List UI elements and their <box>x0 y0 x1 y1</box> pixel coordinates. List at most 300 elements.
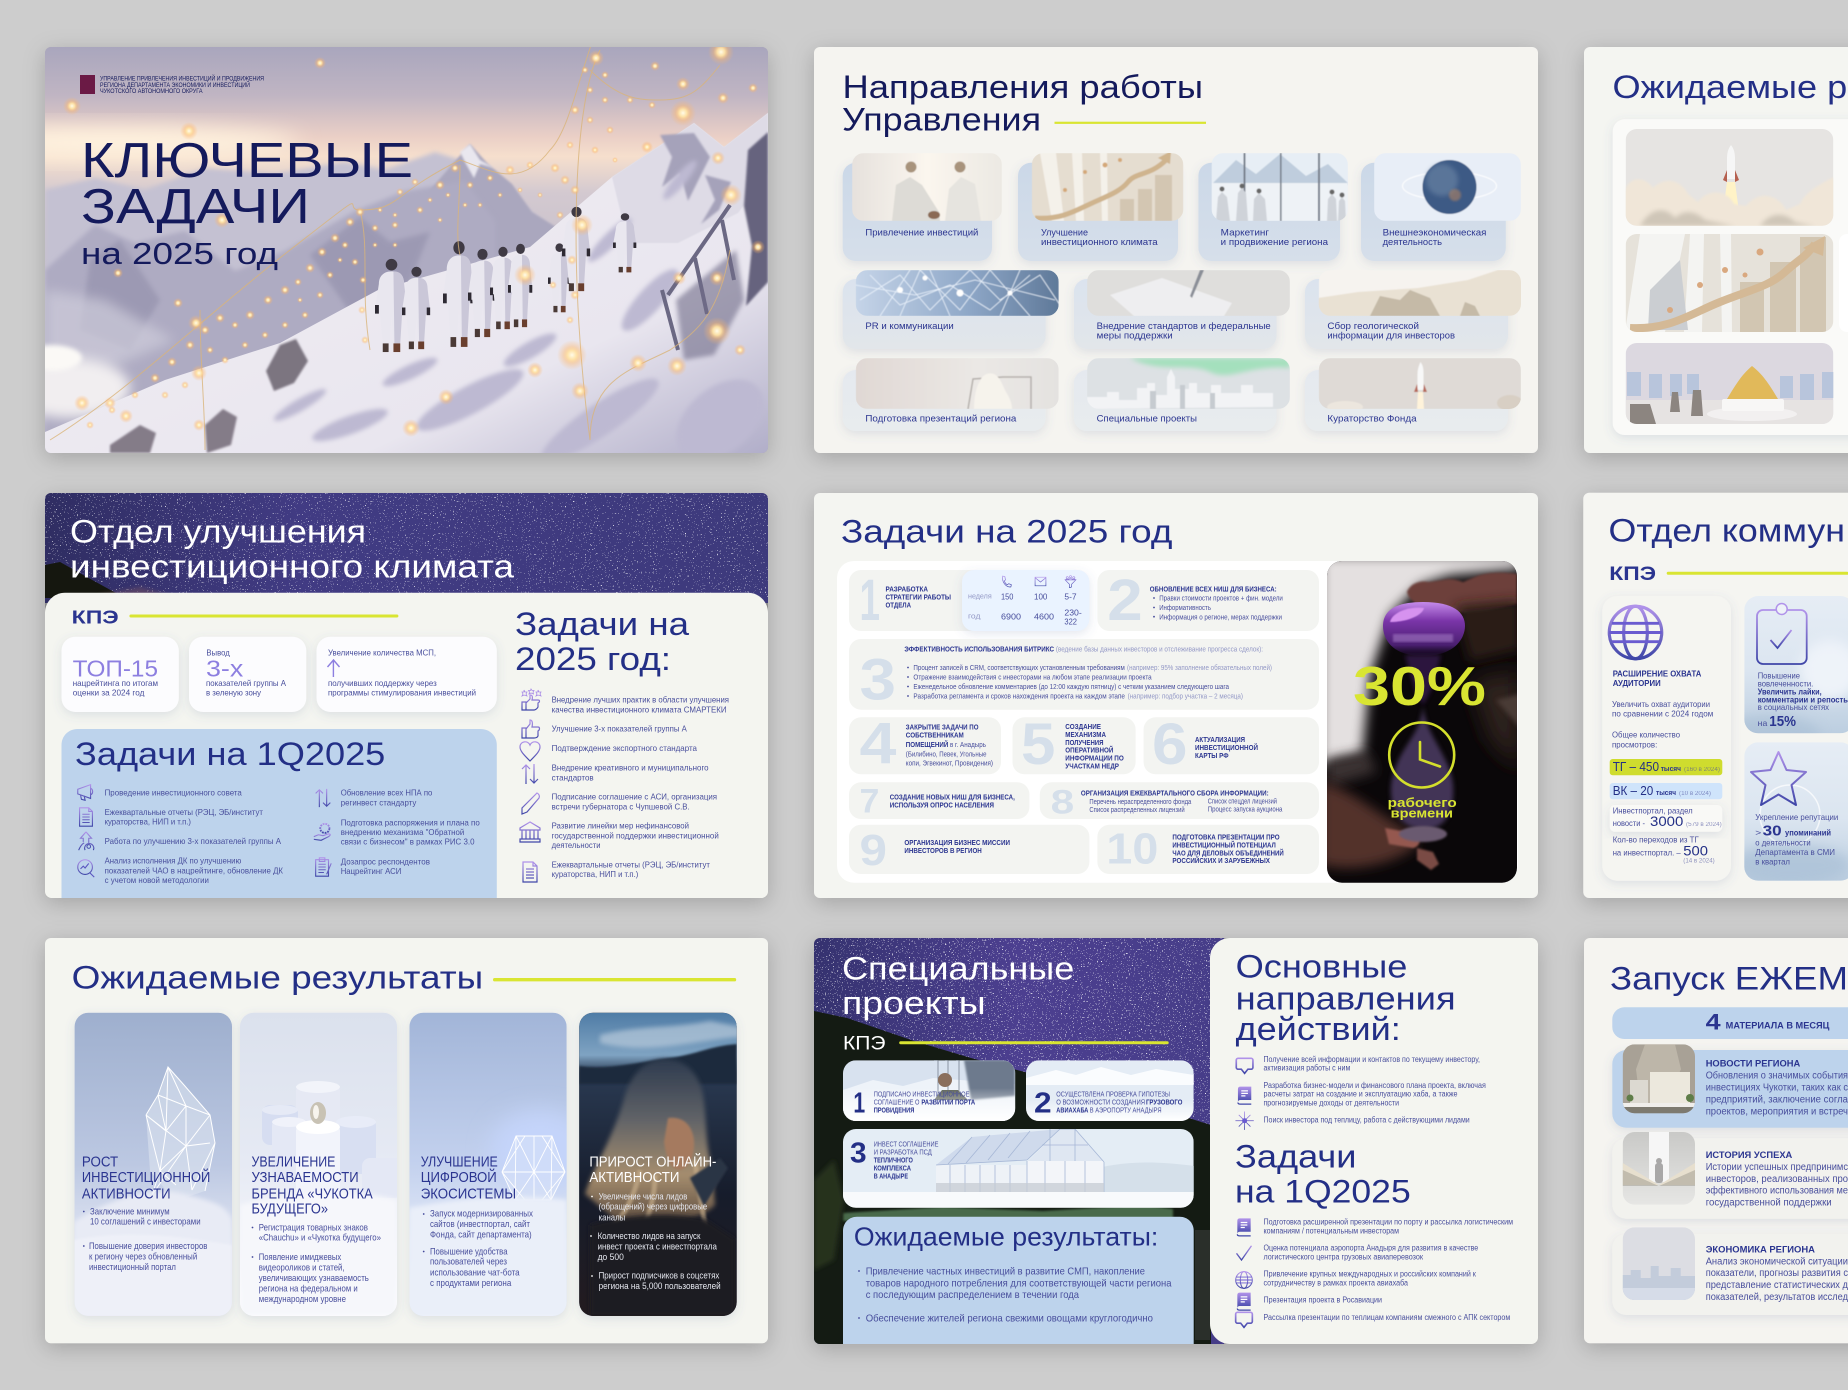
result card: brand awareness: УЗНАВАЕМОСТИ <box>252 1169 359 1186</box>
action list: Получение всей информации и контактов по текущему инвестору, <box>1264 1055 1480 1064</box>
result card: digital ecosystem: Фонда, сайт департамента) <box>430 1230 532 1241</box>
direction card: geology: Сбор геологической <box>1327 321 1419 331</box>
task 2: Информация о регионе, мерах поддержки <box>1159 614 1282 621</box>
heading: Задачи на 2025 год <box>841 514 1173 550</box>
task 2 <box>1097 568 1319 633</box>
lower hand <box>1320 782 1418 868</box>
department caption: РЕГИОНА ДЕПАРТАМЕНТА ЭКОНОМИКИ И ИНВЕСТИЦИЙ <box>100 81 250 89</box>
panel: cover slide <box>36 44 776 466</box>
result card: brand awareness: международном уровне <box>259 1294 346 1305</box>
material card: regional news: НОВОСТИ РЕГИОНА <box>1706 1059 1800 1070</box>
task 1 <box>849 568 1089 633</box>
task 3: (ведение базы данных инвесторов и отслеживание прогресса сделок): <box>1056 645 1263 653</box>
contact targets table: 230- <box>1064 607 1082 617</box>
result card: digital ecosystem: пользователей через <box>430 1257 507 1268</box>
KPI card: three indicators <box>189 637 306 712</box>
direction card: special projects <box>1074 358 1290 431</box>
task list: с учетом новой методологии <box>105 875 209 885</box>
direction card: marketing: и продвижение региона <box>1221 237 1328 247</box>
task 5: ОПЕРАТИВНОЙ <box>1065 746 1113 755</box>
project card 2: 2 <box>1034 1088 1052 1120</box>
task list: Подготовка распоряжения и плана по <box>341 817 480 827</box>
project card 2 <box>1026 1060 1194 1121</box>
metric: investment portal: 3000 <box>1650 813 1684 829</box>
upper bulb <box>1383 602 1465 656</box>
task 3: (например: подбор участка – 2 месяца) <box>1128 692 1243 700</box>
task 3: (например: 95% заполнение обязательных полей) <box>1127 664 1272 672</box>
task 6: 6 <box>1152 712 1188 777</box>
action list: Разработка бизнес-модели и финансового плана проекта, включая <box>1264 1081 1486 1090</box>
icon: star <box>1751 752 1806 805</box>
panel: main directions of action <box>1210 938 1538 1344</box>
task 3: Разработка регламента и сроков нахождения проекта на каждом этапе <box>913 692 1125 700</box>
metric: Telegram: тысяч <box>1661 766 1681 773</box>
caption: рабочего <box>1388 795 1457 810</box>
result card: digital ecosystem: ЭКОСИСТЕМЫ <box>421 1185 516 1202</box>
department caption <box>100 74 264 95</box>
result card: online activity: (обращений) через цифровые <box>599 1202 707 1213</box>
task 10: ПОДГОТОВКА ПРЕЗЕНТАЦИИ ПРО <box>1172 834 1280 841</box>
task 4 <box>849 711 1001 776</box>
task 3: Еженедельное обновление комментариев (до 12:00 каждую пятницу) с четким указанием следующего шага <box>913 683 1229 691</box>
task 7 <box>849 782 1029 821</box>
result card: investment activity: 10 соглашений с инвесторами <box>90 1217 201 1228</box>
panel: tasks for 1Q2025 <box>62 729 497 898</box>
heading: проекты <box>842 985 986 1021</box>
direction card: climate: Улучшение <box>1041 228 1088 238</box>
upper hand <box>1407 573 1517 613</box>
expedition team <box>375 207 636 352</box>
card: audience reach: Общее количество <box>1612 730 1680 740</box>
card: engagement: вовлеченности. <box>1758 678 1813 688</box>
result card: online activity: Количество лидов на запуск <box>598 1231 701 1242</box>
panel: expected results of projects: с последующим распределением в течении года <box>866 1289 1079 1301</box>
icon: arrow up <box>328 660 340 677</box>
result card: digital ecosystem: использование чат-бота <box>430 1267 520 1278</box>
contact targets table <box>962 570 1089 631</box>
logo <box>80 75 95 94</box>
direction card: standards: Внедрение стандартов и федеральные <box>1097 321 1271 331</box>
card: reputation: в квартал <box>1755 856 1790 866</box>
task 3: Процент записей в CRM, соответствующих установленным требованиям <box>913 664 1125 672</box>
task 4: в г. Анадырь <box>950 742 986 749</box>
image: exhibition hall <box>1626 343 1834 424</box>
project card 1: ПОДПИСАНО ИНВЕСТИЦИОННОЕ <box>874 1092 970 1099</box>
result card: online activity: АКТИВНОСТИ <box>589 1169 680 1186</box>
task 7: СОЗДАНИЕ НОВЫХ НИШ ДЛЯ БИЗНЕСА, <box>890 795 1015 802</box>
task 1: СТРАТЕГИИ РАБОТЫ <box>886 594 951 601</box>
yearly task icons <box>520 689 541 882</box>
direction card: investments <box>843 153 1002 261</box>
panel: expected results of projects <box>843 1217 1194 1344</box>
task 4: СОБСТВЕННИКАМ <box>906 733 964 740</box>
heading <box>842 950 1074 1021</box>
project card 1 <box>843 1060 1015 1121</box>
metric: transitions <box>1613 834 1715 864</box>
result card: investment activity: РОСТ <box>82 1154 118 1171</box>
result card: online activity: региона на 5,000 пользователей <box>599 1281 721 1292</box>
KPI label: КПЭ <box>1609 564 1656 585</box>
yearly task list: кураторства, НИП и т.п.) <box>552 869 638 879</box>
task 5: МЕХАНИЗМА <box>1065 732 1106 739</box>
task list: регинвест стандарту <box>341 797 417 807</box>
heading: Специальные <box>842 950 1074 986</box>
direction card: geology: информации для инвесторов <box>1327 331 1455 341</box>
yearly task list: встречи губернатора с Чупшевой С.В. <box>552 801 690 811</box>
project card 3: ИНВЕСТ СОГЛАШЕНИЕ <box>874 1142 939 1149</box>
project card 1: ПРОВИДЕНИЯ <box>874 1108 914 1115</box>
heading: Запуск ЕЖЕМ <box>1610 960 1848 996</box>
card: engagement <box>1744 596 1848 734</box>
panel: expected results of projects: товаров народного потребления для соответствующей части региона <box>866 1277 1172 1289</box>
icon: globe <box>1609 606 1662 659</box>
direction card: climate: инвестиционного климата <box>1041 237 1158 247</box>
contact targets table: 150 <box>1001 591 1014 601</box>
inner panel <box>1613 119 1848 435</box>
project card 3: 3 <box>850 1138 867 1170</box>
task 5: СОЗДАНИЕ <box>1065 724 1101 731</box>
task 3: 3 <box>860 647 896 712</box>
image: rocket launch <box>1625 129 1834 230</box>
result card: digital ecosystem <box>409 1013 590 1316</box>
project card 1: СОГЛАШЕНИЕ О <box>874 1100 920 1107</box>
project card 3: И РАЗРАБОТКА ПСД <box>874 1150 932 1157</box>
task 8: 8 <box>1051 783 1074 821</box>
task 10: ЧАО ДЛЯ ДЕЛОВЫХ ОБЪЕДИНЕНИЙ <box>1172 848 1284 857</box>
direction card: presentations: Подготовка презентаций региона <box>865 414 1016 424</box>
direction card: foreign trade: Внешнеэкономическая <box>1383 228 1487 238</box>
quarter task list: логистического центра грузовых авиаперевозок <box>1264 1253 1423 1262</box>
task 10: 10 <box>1106 824 1158 873</box>
panel: investment climate department <box>45 493 768 898</box>
result card: digital ecosystem: Повышение удобства <box>430 1246 508 1257</box>
string lights <box>50 20 765 450</box>
task 6: КАРТЫ РФ <box>1195 753 1229 760</box>
heading <box>842 69 1203 138</box>
task board <box>837 561 1518 883</box>
quarter task list: Рассылка презентации по теплицам компаниям смежного с АПК сектором <box>1264 1313 1510 1322</box>
panel: monthly launch (cropped) <box>1584 938 1848 1343</box>
contact targets table: 6900 <box>1001 611 1021 621</box>
direction card: foreign trade <box>1361 153 1521 261</box>
task list: Ежеквартальные отчеты (РЭЦ, ЭБ/институт <box>105 807 263 817</box>
project card 1: 1 <box>853 1088 865 1120</box>
result card: digital ecosystem: сайтов (инвестпортал, сайт <box>430 1219 531 1230</box>
card: audience reach: по сравнении с 2024 годом <box>1612 709 1713 719</box>
rock outcrops <box>266 339 308 391</box>
direction card: marketing: Маркетинг <box>1221 228 1270 238</box>
quarter task list: Презентация проекта в Росавиации <box>1264 1296 1382 1305</box>
metric: investment portal: Инвестпортал, раздел <box>1613 805 1693 815</box>
result card: online activity: каналы <box>599 1212 625 1223</box>
task 3: ЭФФЕКТИВНОСТЬ ИСПОЛЬЗОВАНИЯ БИТРИКС <box>904 646 1054 653</box>
heading: Ожидаемые результаты <box>72 959 483 995</box>
task 2: 2 <box>1107 568 1143 633</box>
result card: brand awareness: видеороликов и статей, <box>259 1262 345 1273</box>
heading: tasks for 2025 <box>515 606 689 677</box>
task list: показателей ЧАО в нацрейтинге, обновление ДК <box>105 865 283 875</box>
task 6 <box>1144 712 1319 777</box>
task 9: ОРГАНИЗАЦИЯ БИЗНЕС МИССИИ <box>904 840 1010 847</box>
heading: Управления <box>842 102 1041 138</box>
metric: Telegram <box>1610 759 1722 775</box>
card: engagement: в социальных сетях <box>1758 702 1830 712</box>
yearly task list: Подтверждение экспортного стандарта <box>552 743 697 753</box>
image: hourglass with 30 percent callout <box>1320 555 1520 883</box>
result card: digital ecosystem: с продуктами региона <box>430 1278 512 1289</box>
result card: online activity <box>579 1013 740 1316</box>
metric: Telegram: (160 в 2024) <box>1684 767 1720 773</box>
task 9: ИНВЕСТОРОВ В РЕГИОН <box>904 848 982 855</box>
direction card: foreign trade: деятельность <box>1383 237 1442 247</box>
result card: digital ecosystem: Запуск модернизированных <box>430 1209 533 1220</box>
task 7: 7 <box>860 783 879 821</box>
card: reputation: Укрепление репутации <box>1755 812 1839 822</box>
lower bulb <box>1391 705 1453 829</box>
task 1: 1 <box>860 568 880 633</box>
yearly task list: Внедрение креативного и муниципального <box>552 763 709 773</box>
result card: brand awareness: региона на федеральном и <box>259 1284 358 1295</box>
task 9: 9 <box>860 826 887 875</box>
direction card: presentations <box>843 358 1059 431</box>
result card: brand awareness: «Chauchu» и «Чукотка будущего» <box>259 1233 381 1244</box>
heading: инвестиционного климата <box>70 548 514 584</box>
quarter task list: Подготовка расширенной презентации по порту и рассылка логистическим <box>1264 1218 1513 1227</box>
contact targets table: 5-7 <box>1064 591 1077 601</box>
card: reputation: 30 <box>1763 823 1782 840</box>
KPI card: three indicators: в зеленую зону <box>206 688 262 698</box>
material card: regional news <box>1612 1044 1848 1128</box>
panel: expected results of projects: Ожидаемые результаты: <box>854 1222 1158 1252</box>
task 4: 4 <box>860 711 896 776</box>
panel: main directions of action: Задачи <box>1235 1138 1356 1174</box>
task 2: Правки стоимости проектов + фин. модели <box>1159 596 1283 603</box>
panel: expected results of projects: Привлечение частных инвестиций в развитие СМП, накопление <box>866 1265 1145 1277</box>
KPI card: top 15 <box>62 637 179 712</box>
yearly task list: качества инвестиционного климата СМАРТЕКИ <box>552 704 727 714</box>
result card: brand awareness: БУДУЩЕГО» <box>252 1200 328 1217</box>
contact targets table: неделя <box>968 594 992 601</box>
heading: tasks for 2025: 2025 год: <box>515 641 671 677</box>
project card 3: КОМПЛЕКСА <box>874 1166 911 1173</box>
project card 2: О ВОЗМОЖНОСТИ СОЗДАНИЯ <box>1056 1100 1145 1107</box>
panel: expected results of projects: Обеспечение жителей региона свежими овощами круглогодично <box>866 1312 1153 1324</box>
task list: кураторства, НИП и т.п.) <box>105 817 191 827</box>
cover title: ЗАДАЧИ <box>81 180 310 234</box>
card: engagement: Повышение <box>1758 670 1800 680</box>
task 2: Информативность <box>1159 605 1211 612</box>
task 6: ИНВЕСТИЦИОННОЙ <box>1195 743 1258 752</box>
card: engagement: на <box>1758 718 1768 728</box>
materials per month bar: МАТЕРИАЛА В МЕСЯЦ <box>1726 1021 1830 1031</box>
yearly task list <box>552 695 729 879</box>
card: audience reach: просмотров: <box>1612 739 1657 749</box>
result card: brand awareness: УВЕЛИЧЕНИЕ <box>252 1154 335 1171</box>
task list: Дозапрос респондентов <box>341 856 430 866</box>
panel: special projects <box>814 938 1538 1344</box>
task 10: ИНВЕСТИЦИОННЫЙ ПОТЕНЦИАЛ <box>1172 840 1276 849</box>
project card 2: В АЭРОПОРТУ АНАДЫРЯ <box>1090 1108 1162 1115</box>
contact targets table: год <box>968 614 980 621</box>
yearly task list: деятельности <box>552 840 601 850</box>
card: reputation: Департамента в СМИ <box>1755 847 1835 857</box>
panel: expected results <box>45 938 768 1343</box>
direction card: PR: PR и коммуникации <box>865 321 954 331</box>
KPI card: top 15: оценки за 2024 год <box>73 688 144 698</box>
task 8: Процесс запуска аукциона <box>1208 807 1282 814</box>
task 1: РАЗРАБОТКА <box>886 586 928 593</box>
icon: clipboard check <box>1757 610 1807 664</box>
result card: online activity: до 500 <box>598 1252 624 1263</box>
direction card: investments: Привлечение инвестиций <box>865 228 978 238</box>
material card: regional economy: ЭКОНОМИКА РЕГИОНА <box>1706 1244 1815 1255</box>
quarter task list: Привлечение крупных международных и российских компаний к <box>1264 1270 1476 1279</box>
card: audience reach: РАСШИРЕНИЕ ОХВАТА <box>1613 669 1701 679</box>
result card: investment activity: к региону через обновленный <box>89 1251 197 1262</box>
panel: main directions of action: Основные <box>1236 949 1407 985</box>
action list <box>1264 1055 1486 1125</box>
KPI card: three indicators: 3-х <box>206 656 244 682</box>
result card: digital ecosystem: ЦИФРОВОЙ <box>421 1168 497 1186</box>
card: reputation: > <box>1755 828 1761 838</box>
result card: online activity: ПРИРОСТ ОНЛАЙН- <box>589 1153 716 1171</box>
metric: investment portal <box>1610 805 1722 832</box>
project card 3 <box>843 1129 1194 1208</box>
result card: online activity: инвест проекта с инвестпортала <box>598 1241 717 1252</box>
result card: online activity: Прирост подписчиков в соцсетях <box>599 1271 720 1282</box>
heading: Направления работы <box>842 69 1203 105</box>
direction card: special projects: Специальные проекты <box>1097 414 1197 424</box>
task 4: копи, Эгвекинот, Провидения) <box>906 761 993 768</box>
card: engagement: 15% <box>1769 713 1796 730</box>
yearly task list: стандартов <box>552 772 594 782</box>
project card 2: АВИАХАБА <box>1056 1108 1088 1115</box>
task 5: УЧАСТКАМ НЕДР <box>1065 764 1119 771</box>
panel: directions of work <box>814 47 1538 453</box>
action list: активизация работы с ним <box>1264 1064 1350 1073</box>
metric: transitions: (14 в 2024) <box>1683 858 1715 864</box>
task 3: Отражение взаимодействия с инвесторами на любом этапе реализации проекта <box>913 674 1152 682</box>
action list: Поиск инвестора под теплицу, работа с действующими лидами <box>1264 1116 1470 1125</box>
KPI card: small business growth: программы стимулирования инвестиций <box>328 688 476 698</box>
result card: investment activity <box>74 1013 232 1316</box>
blurred light wall <box>1320 555 1520 765</box>
card: audience reach: Увеличить охват аудитории <box>1612 699 1710 709</box>
yearly task list: Подписание соглашение с АСИ, организация <box>552 792 717 802</box>
icon: clock <box>1389 722 1454 788</box>
KPI card: top 15: нацрейтинга по итогам <box>73 678 158 688</box>
KPI card: small business growth <box>316 637 497 712</box>
metric: transitions: Кол-во переходов из ТГ <box>1613 834 1699 844</box>
direction card: standards: меры поддержки <box>1097 331 1173 341</box>
result card: online activity: Увеличение числа лидов <box>599 1191 687 1202</box>
task 8: Список распределенных лицензий <box>1089 806 1185 814</box>
cover title <box>81 134 413 271</box>
materials per month bar <box>1612 1007 1848 1039</box>
project card 2: ГРУЗОВОГО <box>1146 1100 1183 1107</box>
materials per month bar: 4 <box>1706 1009 1722 1034</box>
direction card: fund: Кураторство Фонда <box>1327 414 1417 424</box>
task 10 <box>1097 824 1319 874</box>
task 4: (Билибино, Певек, Угольные <box>906 750 987 758</box>
material card: success story: государственной поддержки <box>1706 1198 1832 1209</box>
big number: 30% <box>1353 655 1486 717</box>
task 5 <box>1012 712 1136 777</box>
task 9 <box>849 825 1089 875</box>
department caption: УПРАВЛЕНИЕ ПРИВЛЕЧЕНИЯ ИНВЕСТИЦИЙ И ПРОДВИЖЕНИЯ <box>100 74 264 82</box>
direction card: geology <box>1305 270 1522 349</box>
result card: investment activity: ИНВЕСТИЦИОННОЙ <box>82 1168 210 1186</box>
KPI card: three indicators: Вывод <box>206 647 230 657</box>
card: reputation: упоминаний <box>1785 828 1831 838</box>
yearly task list: Ежеквартальные отчеты (РЭЦ, ЭБ/институт <box>552 859 710 869</box>
metric: VK: (10 в 2024) <box>1679 791 1711 797</box>
task list: Проведение инвестиционного совета <box>105 788 242 798</box>
caption <box>1388 795 1457 821</box>
result card: investment activity: инвестиционный портал <box>89 1262 176 1273</box>
task 5: ПОЛУЧЕНИЯ <box>1065 740 1104 747</box>
quarter task list: компаниям / потенциальным инвесторам <box>1264 1226 1399 1235</box>
quarter task list <box>1264 1218 1513 1322</box>
result card: investment activity: Повышение доверия инвесторов <box>89 1241 207 1252</box>
metric: Telegram: ТГ – 450 <box>1613 759 1659 774</box>
panel: expected results (cropped) <box>1584 47 1848 453</box>
task 8: ОРГАНИЗАЦИЯ ЕЖЕКВАРТАЛЬНОГО СБОРА ИНФОРМАЦИИ: <box>1081 790 1269 797</box>
caption: времени <box>1391 806 1453 821</box>
KPI card: top 15: ТОП-15 <box>73 656 158 682</box>
task 8 <box>1040 782 1319 821</box>
snow shadows <box>272 160 757 453</box>
quarter task icons <box>1236 1218 1252 1327</box>
neighbouring card <box>1839 234 1848 332</box>
task icons <box>78 785 331 877</box>
card: audience reach: АУДИТОРИИ <box>1613 678 1661 688</box>
material card: success story: ИСТОРИЯ УСПЕХА <box>1706 1150 1792 1161</box>
metric: investment portal: новости - <box>1613 818 1645 828</box>
quarter task list: сотрудничеству в рамках проекта авиахаба <box>1264 1278 1408 1287</box>
result card: investment activity: АКТИВНОСТИ <box>82 1185 171 1202</box>
quarter task list: Оценка потенциала аэропорта Анадыря для развития в качестве <box>1264 1244 1479 1253</box>
result card: brand awareness: Появление имиджевых <box>259 1252 341 1263</box>
panel: tasks for 1Q2025: Задачи на 1Q2025 <box>75 736 385 772</box>
card: reputation: о деятельности <box>1755 837 1811 847</box>
KPI label: КПЭ <box>72 607 119 627</box>
direction card: climate <box>1018 151 1183 261</box>
project card 1: РАЗВИТИИ ПОРТА <box>921 1100 975 1107</box>
material card: regional economy <box>1612 1227 1848 1315</box>
contact targets table: 100 <box>1034 591 1048 601</box>
material card: success story <box>1612 1132 1848 1219</box>
yearly task list: Внедрение лучших практик в области улучшения <box>552 695 729 705</box>
cover title: на 2025 год <box>81 236 278 271</box>
wooden railing <box>662 205 734 350</box>
task 5: ИНФОРМАЦИИ ПО <box>1065 756 1124 763</box>
metric: investment portal: (579 в 2024) <box>1686 822 1722 828</box>
department caption: ЧУКОТСКОГО АВТОНОМНОГО ОКРУГА <box>100 89 202 95</box>
card: audience reach <box>1602 596 1731 881</box>
direction card: fund <box>1305 358 1523 431</box>
KPI card: three indicators: показателей группы А <box>206 678 286 688</box>
task 5: 5 <box>1021 712 1055 777</box>
heading <box>70 514 514 584</box>
content panel <box>45 593 768 898</box>
task list: Анализ исполнения ДК по улучшению <box>105 855 242 865</box>
image: growth chart <box>1625 234 1833 332</box>
metric: VK: тысяч <box>1656 790 1676 797</box>
panel: main directions of action: направления <box>1236 980 1456 1016</box>
metric: transitions: на инвестпортал. – <box>1613 848 1681 858</box>
heading: Ожидаемые р <box>1612 69 1847 105</box>
